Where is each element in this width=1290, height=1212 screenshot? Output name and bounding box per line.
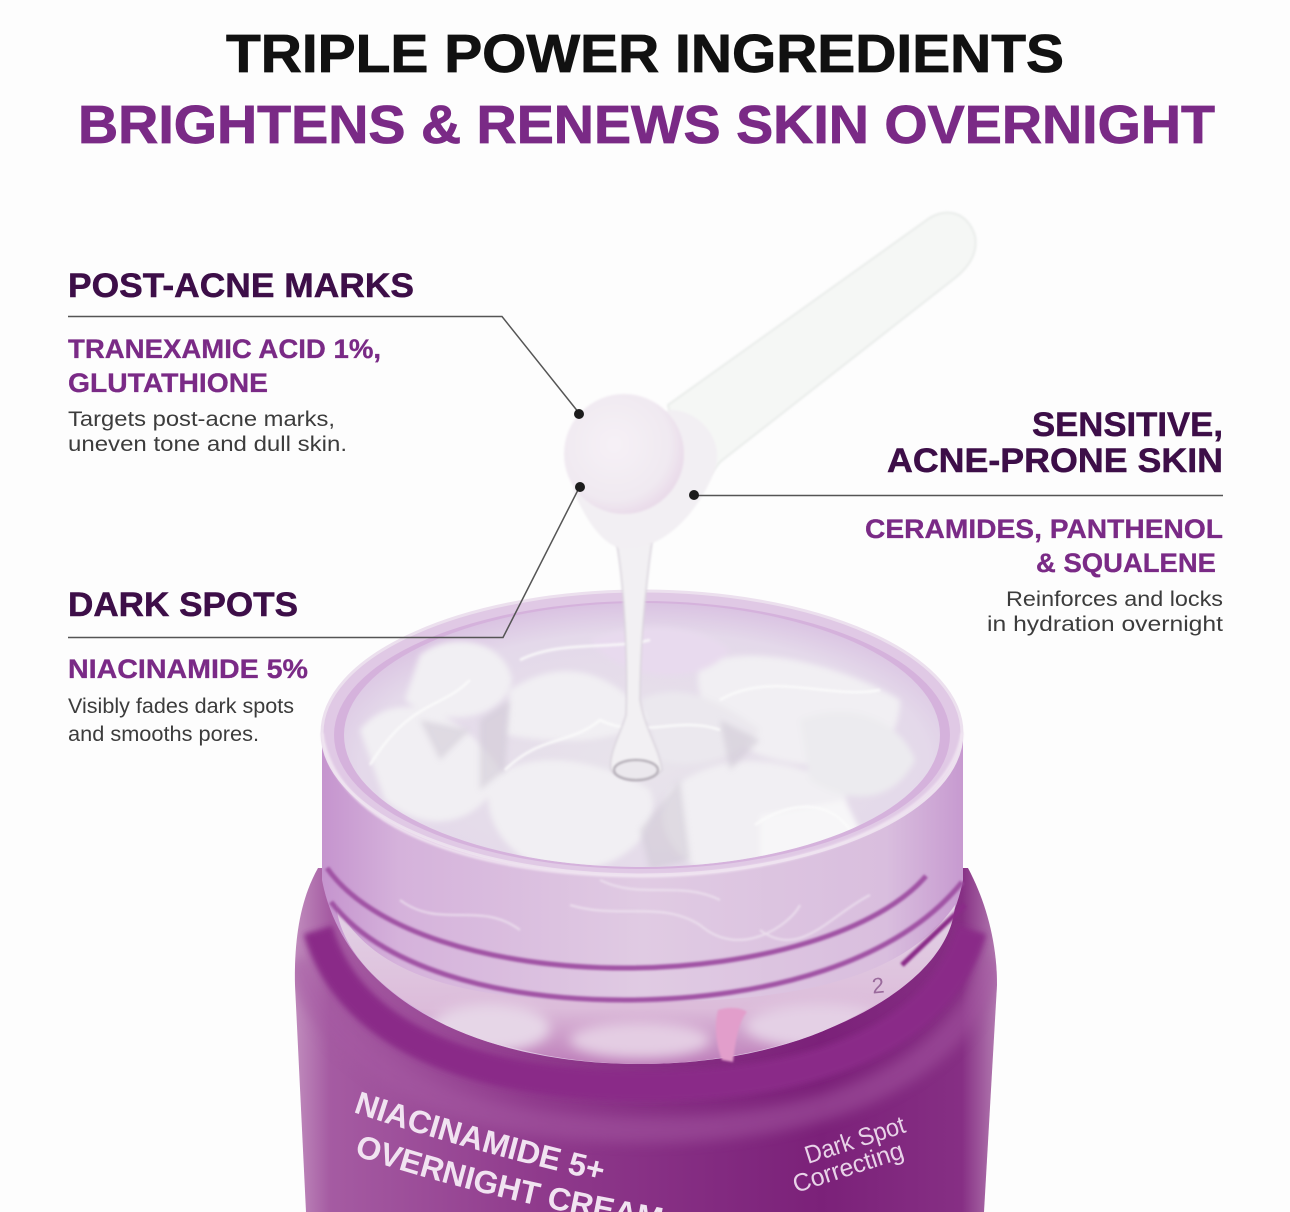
spatula <box>564 213 976 780</box>
rim front highlight <box>322 733 962 876</box>
shoulder light band <box>296 960 996 1130</box>
callout: dark spots: NIACINAMIDE 5% <box>68 654 308 684</box>
dot <box>689 490 699 500</box>
callout: sensitive, acne-prone skin: ACNE-PRONE SKIN <box>887 442 1223 480</box>
thread groove upper <box>327 868 926 968</box>
callout: sensitive, acne-prone skin: & SQUALENE <box>1036 548 1216 578</box>
jar neck <box>322 733 963 1064</box>
spatula handle <box>668 213 976 500</box>
jar side text: Dark Spot <box>801 1111 909 1170</box>
dot <box>575 482 585 492</box>
mold number: 2 <box>871 972 885 999</box>
jar label text <box>354 1092 663 1212</box>
callout: sensitive, acne-prone skin: SENSITIVE, <box>1032 406 1223 444</box>
callout: dark spots: DARK SPOTS <box>68 586 298 624</box>
leader line <box>68 488 579 638</box>
cream ball <box>564 394 684 514</box>
neck marbling <box>400 880 870 940</box>
title: TRIPLE POWER INGREDIENTS <box>226 24 1064 84</box>
callout: sensitive, acne-prone skin: CERAMIDES, PANTHENOL <box>865 514 1223 544</box>
leader line <box>694 494 1223 496</box>
title: BRIGHTENS & RENEWS SKIN OVERNIGHT <box>78 95 1215 155</box>
rim <box>322 591 962 875</box>
callout: sensitive, acne-prone skin: in hydration overnight <box>987 612 1223 636</box>
leader line <box>68 316 579 413</box>
callout: post-acne marks: uneven tone and dull skin. <box>68 432 347 456</box>
pink reflection wedge <box>716 1008 747 1062</box>
callout: post-acne marks: Targets post-acne marks, <box>68 407 335 431</box>
notch <box>902 905 965 965</box>
callout: dark spots: Visibly fades dark spots <box>68 694 294 718</box>
callout: post-acne marks: TRANEXAMIC ACID 1%, <box>68 334 381 364</box>
inner wall <box>334 601 950 869</box>
lower neck window <box>336 905 955 1064</box>
callout: dark spots <box>68 482 585 746</box>
product jar <box>294 590 997 1212</box>
cream on spatula <box>573 410 717 548</box>
dot <box>574 409 584 419</box>
thread groove lower <box>331 882 962 1000</box>
pink reflections <box>430 1004 895 1058</box>
callout: dark spots: and smooths pores. <box>68 722 259 746</box>
jar side text: Correcting <box>789 1137 907 1199</box>
jar body <box>295 868 997 1212</box>
callout: post-acne marks: GLUTATHIONE <box>68 368 268 398</box>
jar label text: NIACINAMIDE 5+ <box>354 1092 604 1178</box>
inner collar band <box>318 930 972 1086</box>
serum drip <box>611 540 662 780</box>
callout: post-acne marks <box>68 267 584 456</box>
callout: sensitive, acne-prone skin: Reinforces and locks <box>1006 587 1223 611</box>
callout: post-acne marks: POST-ACNE MARKS <box>68 267 414 305</box>
callout: sensitive, acne-prone skin <box>689 406 1223 636</box>
cream surface <box>340 595 950 875</box>
title <box>78 24 1215 155</box>
